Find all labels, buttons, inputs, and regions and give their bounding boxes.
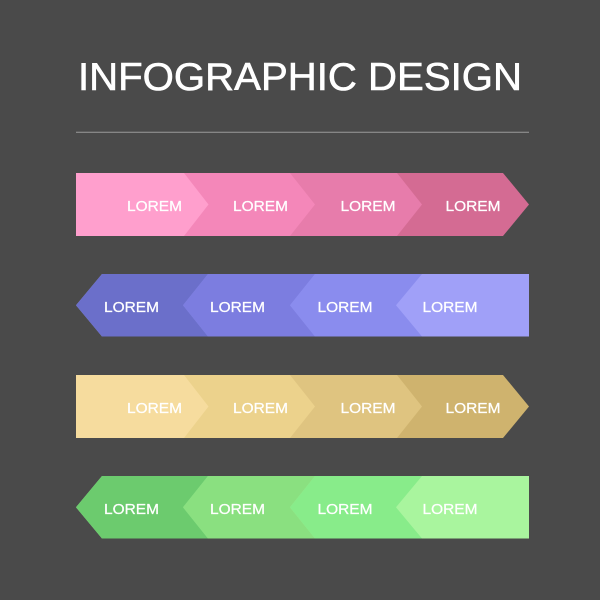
title: INFOGRAPHIC DESIGN [78, 56, 522, 99]
panel: pink arrow bar: LOREM [127, 198, 182, 215]
panel: purple arrow bar: LOREM [422, 299, 478, 316]
panel: green arrow bar: LOREM [318, 501, 372, 518]
panel: pink arrow bar [76, 173, 529, 236]
panel: pink arrow bar: LOREM [340, 198, 396, 215]
panel: purple arrow bar [76, 274, 529, 336]
panel: purple arrow bar: LOREM [104, 299, 159, 316]
panel: pink arrow bar: LOREM [446, 198, 500, 215]
panel: yellow arrow bar: LOREM [233, 400, 288, 417]
panel: yellow arrow bar: LOREM [446, 400, 500, 417]
panel: green arrow bar: LOREM [422, 501, 478, 518]
panel: purple arrow bar: LOREM [318, 299, 372, 316]
panel: purple arrow bar: LOREM [210, 299, 265, 316]
panel: yellow arrow bar: LOREM [340, 400, 396, 417]
panel: yellow arrow bar [76, 375, 529, 438]
panel: yellow arrow bar: LOREM [127, 400, 182, 417]
panel: green arrow bar [76, 476, 529, 538]
panel: pink arrow bar: LOREM [233, 198, 288, 215]
panel: green arrow bar: LOREM [210, 501, 265, 518]
panel: green arrow bar: LOREM [104, 501, 159, 518]
